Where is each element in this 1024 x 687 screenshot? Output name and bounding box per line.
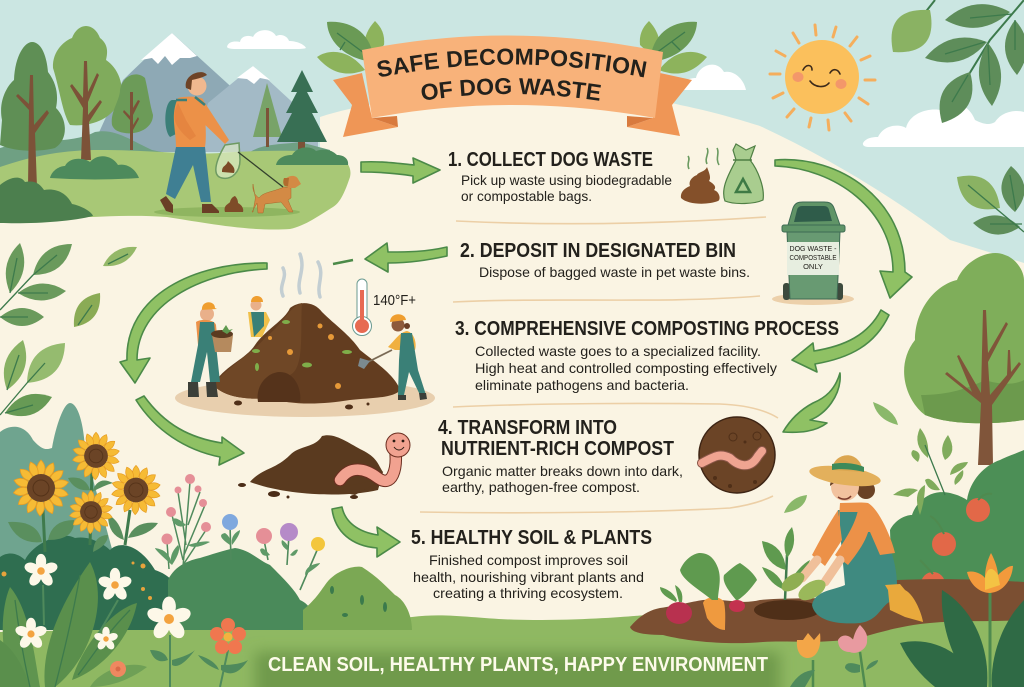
seedling bbox=[754, 527, 820, 620]
scene: lower-right foreground leaves and flowers bbox=[790, 553, 1024, 687]
foliage: left branches bbox=[0, 243, 137, 416]
title: SAFE DECOMPOSITION bbox=[378, 48, 646, 78]
scene: soil bed with vegetables bbox=[630, 527, 1024, 643]
scene: compost mound with worm bbox=[238, 433, 410, 499]
step 1 text: or compostable bags. bbox=[461, 188, 592, 204]
step 4 heading: 4. TRANSFORM INTO bbox=[438, 416, 617, 439]
bushes bbox=[50, 156, 139, 180]
right worker bbox=[358, 314, 427, 400]
step 2 heading: 2. DEPOSIT IN DESIGNATED BIN bbox=[460, 239, 736, 262]
lower grass bbox=[0, 615, 1024, 687]
banner leaves bbox=[317, 21, 707, 74]
panel: top-left meadow scene bbox=[0, 26, 350, 230]
dog bbox=[252, 184, 293, 213]
arrow: step 2 to left with curve bbox=[120, 263, 267, 383]
step 5 text: health, nourishing vibrant plants and bbox=[413, 569, 644, 585]
step 5 text: creating a thriving ecosystem. bbox=[433, 585, 623, 601]
garden background bbox=[0, 403, 115, 630]
radish bbox=[724, 563, 757, 612]
temperature label: 140°F+ bbox=[373, 292, 416, 309]
icon: compost bin: ONLY bbox=[803, 262, 823, 271]
panel: bottom slogan band bbox=[255, 652, 780, 687]
pink flower plants bbox=[155, 474, 325, 590]
step 1 bbox=[448, 148, 672, 204]
foliage: right mid branch bbox=[957, 166, 1024, 235]
step 4 text: Organic matter breaks down into dark, bbox=[442, 463, 683, 479]
step 4 text bbox=[442, 463, 683, 495]
step 3 text: High heat and controlled composting effectively bbox=[475, 360, 777, 376]
step 2 text: Dispose of bagged waste in pet waste bins. bbox=[479, 264, 750, 280]
scene: compost pile with workers bbox=[175, 254, 435, 417]
icon: soil circle with worm bbox=[699, 417, 775, 493]
icon: compost bin: COMPOSTABLE bbox=[790, 253, 836, 262]
slogan: CLEAN SOIL, HEALTHY PLANTS, HAPPY ENVIRONMENT bbox=[268, 653, 768, 676]
large foreground leaves bbox=[0, 562, 147, 687]
icon: poop and compostable bag bbox=[681, 144, 763, 204]
arrow: bin to compost bbox=[792, 310, 889, 372]
step 5 bbox=[411, 526, 652, 601]
arrow: curved top right bbox=[775, 160, 912, 298]
pine tree bbox=[277, 70, 327, 152]
sunflower stems and leaves bbox=[8, 470, 158, 552]
beet bbox=[660, 585, 692, 624]
title bbox=[378, 48, 646, 101]
icon: compost bin bbox=[772, 202, 854, 305]
step 4 heading: NUTRIENT-RICH COMPOST bbox=[441, 437, 674, 460]
left worker bbox=[188, 302, 233, 397]
step 3 bbox=[455, 317, 839, 393]
carrot bbox=[680, 553, 725, 630]
tree far left bbox=[0, 42, 65, 187]
thermometer bbox=[352, 279, 372, 336]
step 5 text: Finished compost improves soil bbox=[429, 552, 628, 568]
step 5 heading: 5. HEALTHY SOIL & PLANTS bbox=[411, 526, 652, 549]
step 5 text bbox=[413, 552, 644, 601]
step 4 bbox=[438, 416, 683, 495]
scene: lower-right plants bbox=[890, 428, 1024, 596]
dark bushes bbox=[0, 536, 210, 630]
arrow: lower left to worm bbox=[136, 396, 244, 465]
step 4 text: earthy, pathogen-free compost. bbox=[442, 479, 640, 495]
mountains bbox=[90, 33, 318, 152]
small green tree bbox=[253, 83, 282, 147]
step 3 text bbox=[475, 343, 777, 393]
icon: sun bbox=[770, 25, 875, 130]
step 3 text: Collected waste goes to a specialized facility. bbox=[475, 343, 761, 359]
icon: gardener bbox=[778, 455, 923, 623]
step 3 heading: 3. COMPREHENSIVE COMPOSTING PROCESS bbox=[455, 317, 839, 340]
small flowers bbox=[14, 554, 248, 687]
arrow: worm to step 5 bbox=[332, 507, 400, 557]
step 4 heading bbox=[438, 416, 674, 460]
middle worker bbox=[248, 296, 270, 337]
step 3 text: eliminate pathogens and bacteria. bbox=[475, 377, 689, 393]
step 1 text bbox=[461, 172, 672, 204]
clouds bbox=[227, 30, 1024, 147]
icon: person walking dog bbox=[160, 72, 301, 213]
arrow: to step 2 bbox=[333, 243, 447, 272]
scene: lower-left garden bbox=[0, 403, 1024, 687]
sunflowers bbox=[13, 432, 161, 534]
tree second bbox=[53, 26, 122, 160]
arrow: leaf to soil circle bbox=[783, 373, 840, 432]
title: OF DOG WASTE bbox=[422, 78, 601, 101]
step 1 text: Pick up waste using biodegradable bbox=[461, 172, 672, 188]
leash bbox=[238, 152, 283, 187]
foliage: top-right branch bbox=[892, 0, 1024, 123]
waste pile bbox=[225, 196, 243, 212]
step 1 heading: 1. COLLECT DOG WASTE bbox=[448, 148, 653, 171]
scene: right tree bbox=[784, 253, 1024, 513]
arrow: meadow to step 1 bbox=[361, 158, 440, 183]
waste bag bbox=[216, 143, 240, 178]
panel: title banner bbox=[317, 21, 707, 137]
tree third bbox=[112, 74, 153, 150]
step 2 bbox=[460, 239, 750, 280]
icon: compost bin: DOG WASTE - bbox=[790, 244, 837, 253]
